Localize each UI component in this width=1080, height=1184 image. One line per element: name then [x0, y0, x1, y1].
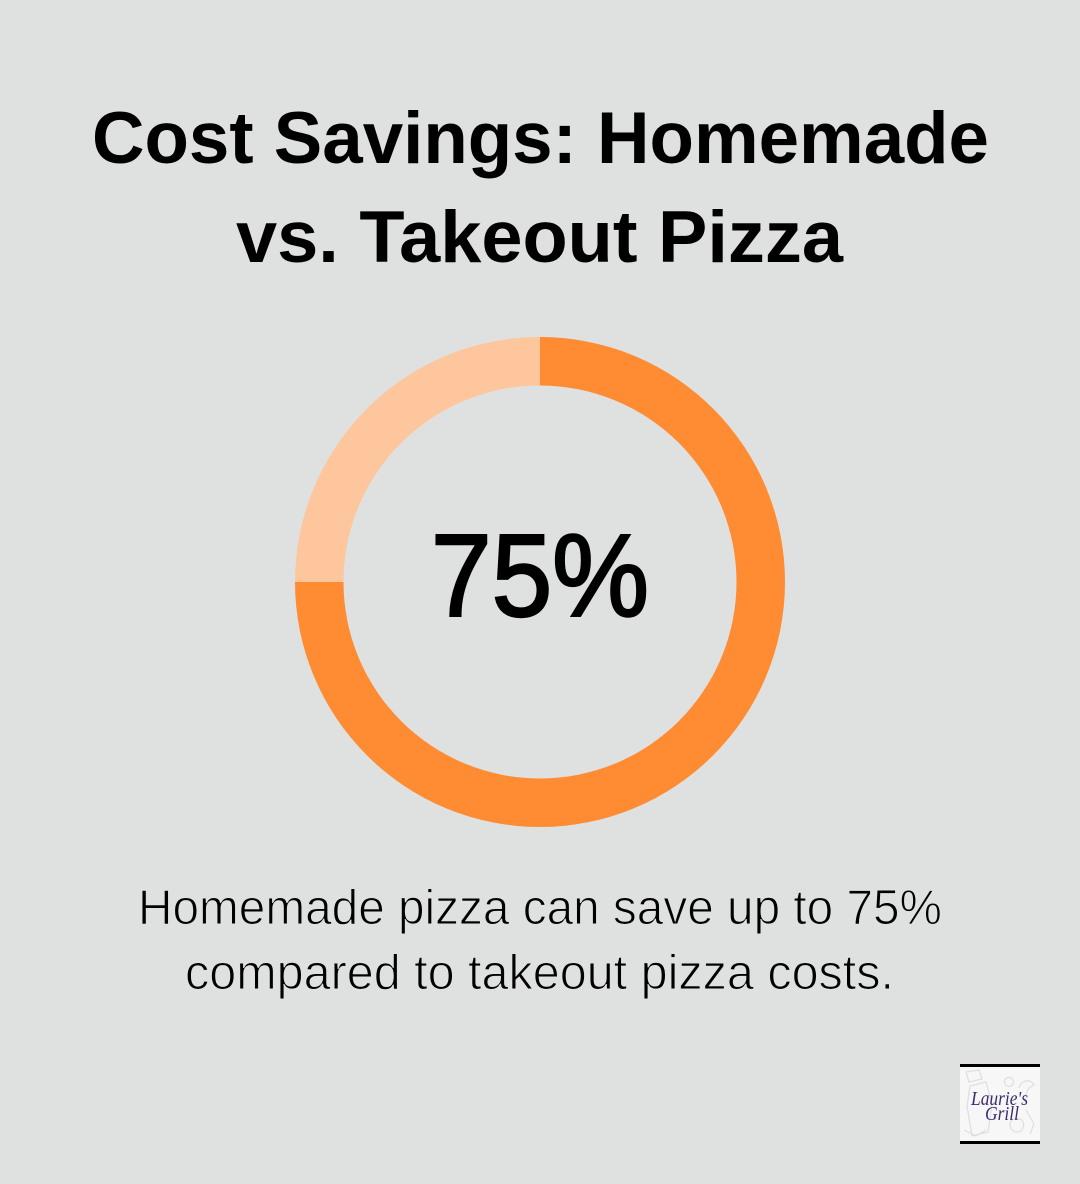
logo text: Grill	[985, 1103, 1019, 1125]
donut 75% segment	[295, 337, 785, 827]
title: Cost Savings: Homemade	[92, 98, 989, 179]
donut center value: 75%	[431, 510, 649, 641]
logo top bar	[960, 1064, 1040, 1067]
description text	[138, 881, 942, 1000]
description text: Homemade pizza can save up to 75%	[138, 881, 942, 935]
logo text: Laurie's	[970, 1088, 1028, 1110]
logo text	[970, 1088, 1028, 1125]
logo bottom bar	[960, 1141, 1040, 1144]
title: vs. Takeout Pizza	[236, 197, 844, 278]
description text: compared to takeout pizza costs.	[185, 946, 894, 1000]
logo: Laurie's Grill	[960, 1064, 1040, 1144]
logo faint sketch background	[964, 1070, 1034, 1136]
donut remainder segment	[295, 337, 540, 582]
title	[92, 98, 989, 278]
donut chart: 75% savings	[295, 337, 785, 827]
